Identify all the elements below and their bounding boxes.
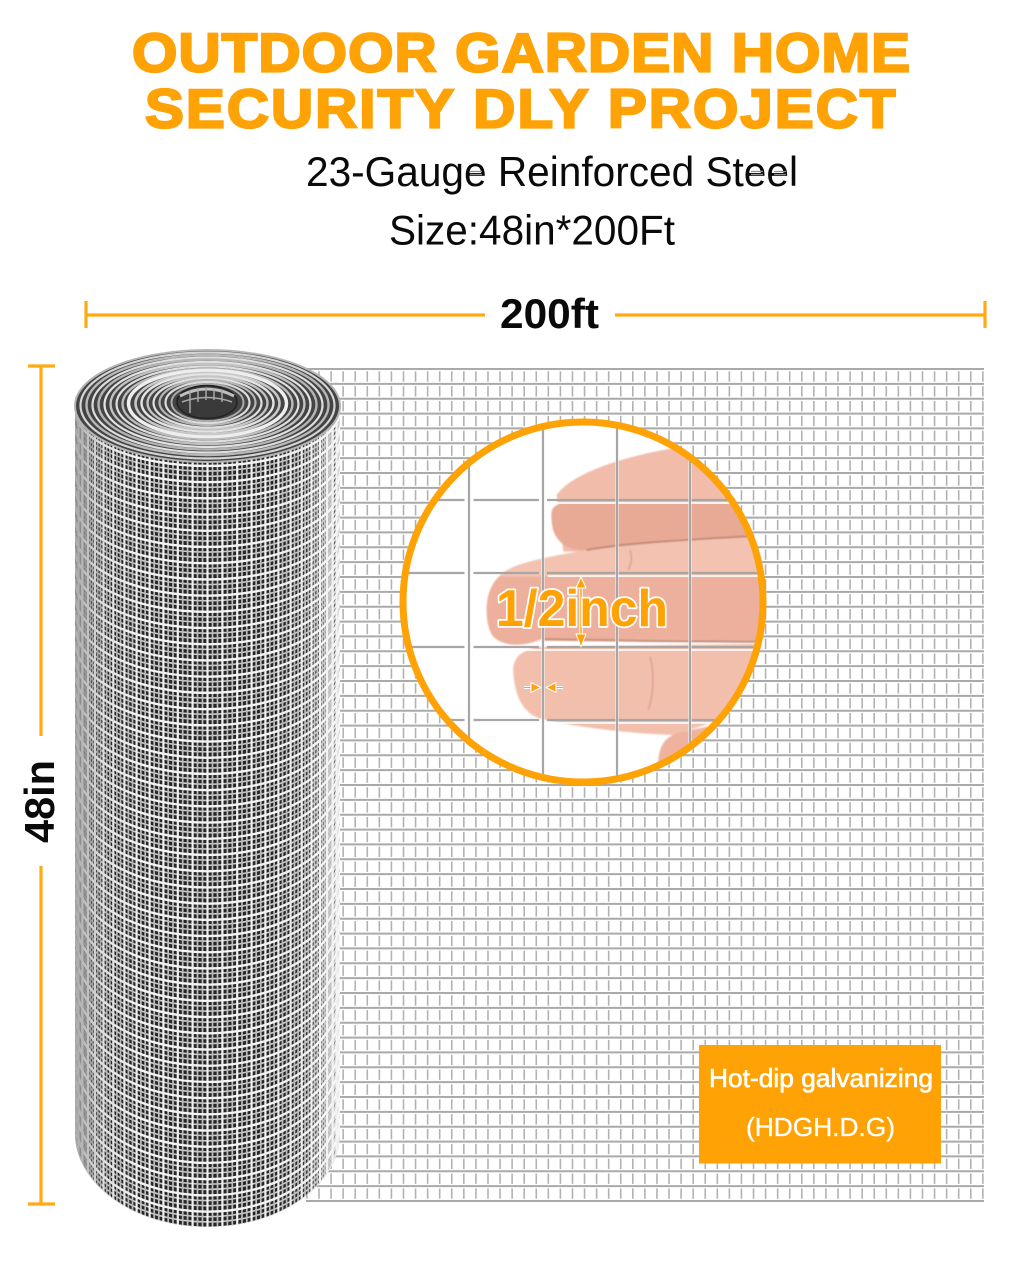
mesh size label: 1/2inch [496, 580, 668, 638]
height label: 48in [16, 760, 63, 843]
title line 2: SECURITY DLY PROJECT [145, 79, 895, 140]
width arrow line [86, 301, 985, 328]
magnified wire grid [408, 428, 758, 776]
badge: hot-dip galvanizing [699, 1045, 941, 1164]
subtitle: size: Size:48in*200Ft [389, 206, 675, 254]
unrolled wire mesh [306, 368, 984, 1201]
title [132, 23, 910, 140]
magnifier ring [403, 422, 763, 782]
badge line 1: Hot-dip galvanizing [709, 1063, 933, 1093]
roll top face [75, 350, 340, 462]
subtitle: gauge: 23-Gauge Reinforced Steel [306, 148, 798, 195]
dimension: 48in height [16, 366, 63, 1204]
magnifier circle [400, 418, 766, 786]
dimension: 200ft width [86, 290, 985, 337]
width label: 200ft [500, 290, 599, 337]
vertical measure arrow [576, 577, 586, 647]
roll body [70, 400, 345, 1240]
height arrow line [28, 366, 55, 1204]
hand photo [486, 448, 760, 762]
wire mesh roll [70, 350, 345, 1240]
badge background [699, 1045, 941, 1164]
title line 1: OUTDOOR GARDEN HOME [132, 23, 910, 84]
wire width arrows [524, 682, 563, 692]
roll centre hole [177, 386, 237, 418]
magnifier background [402, 421, 764, 783]
badge line 2: (HDGH.D.G) [746, 1112, 895, 1142]
image artefacts on subtitle letters [470, 172, 786, 174]
